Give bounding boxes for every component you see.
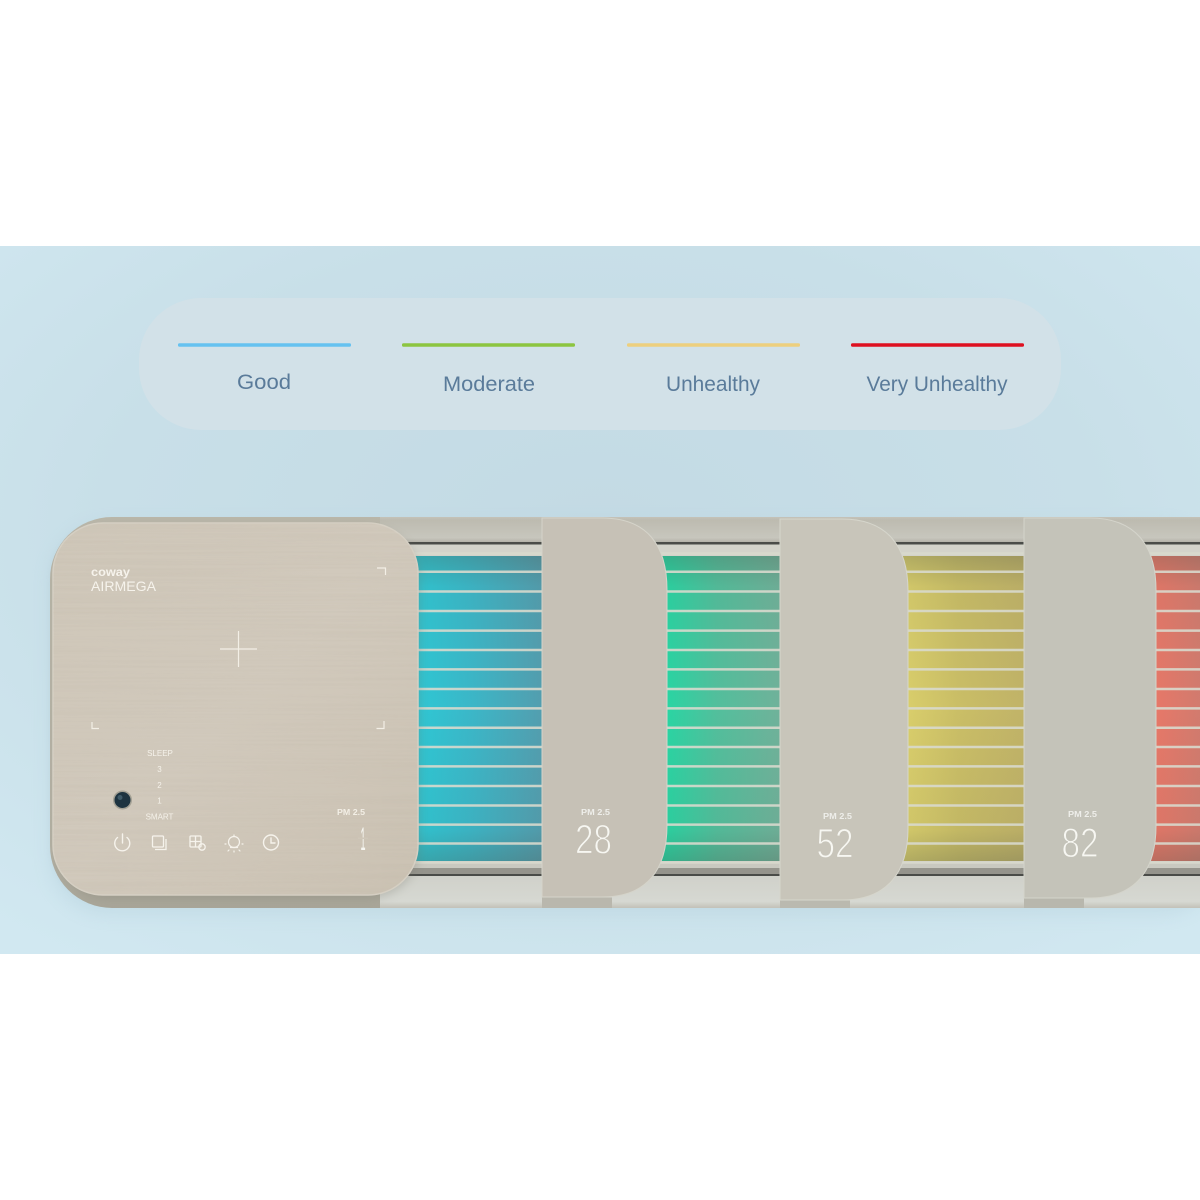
digital readout bbox=[358, 821, 368, 857]
fan speed labels: 3 bbox=[157, 765, 162, 774]
fan speed labels: 1 bbox=[157, 796, 162, 806]
icon: clock bbox=[264, 835, 278, 850]
panel segment: reading 82 bbox=[1024, 518, 1156, 908]
digital readout: 28 bbox=[575, 816, 612, 862]
bottom rail bbox=[380, 876, 1200, 908]
vent light shading bbox=[410, 556, 1200, 861]
fan speed labels: 2 bbox=[157, 781, 162, 790]
legend item: good: Good bbox=[237, 371, 291, 394]
logo: coway bbox=[91, 567, 131, 579]
legend item: moderate bbox=[402, 343, 575, 396]
digital readout: 52 bbox=[816, 820, 854, 866]
legend item: good bbox=[178, 343, 351, 394]
background band bbox=[0, 246, 1200, 954]
air quality light: red bbox=[1145, 556, 1200, 861]
vent slats bbox=[410, 554, 1200, 862]
PM 2.5 label: PM 2.5 bbox=[337, 808, 366, 817]
icon: grid with check bbox=[190, 836, 205, 850]
main control panel: 1 bbox=[360, 821, 366, 857]
panel segment: reading 82: PM 2.5 bbox=[1068, 810, 1098, 819]
device body bbox=[50, 517, 1200, 908]
wood grain texture bbox=[53, 523, 418, 895]
vent housing bbox=[380, 542, 1200, 876]
icon: power bbox=[115, 834, 130, 851]
icon: bulb bbox=[225, 835, 243, 852]
logo bbox=[91, 567, 157, 594]
panel edge shadow bbox=[56, 528, 420, 898]
legend item: very unhealthy: Very Unhealthy bbox=[866, 373, 1008, 396]
air quality light: green bbox=[660, 556, 785, 861]
air quality light: blue bbox=[410, 556, 545, 861]
fan speed labels: SMART bbox=[146, 812, 174, 822]
legend item: unhealthy: Unhealthy bbox=[666, 373, 760, 396]
top band bbox=[380, 517, 1200, 543]
panel segment: reading 28 bbox=[542, 518, 667, 908]
icon: layers bbox=[152, 836, 166, 850]
device: air purifier strip bbox=[50, 517, 1200, 914]
fan speed labels: SLEEP bbox=[147, 749, 173, 758]
panel segment: reading 28: PM 2.5 bbox=[581, 808, 611, 817]
legend pill bbox=[139, 298, 1061, 430]
legend item: moderate: Moderate bbox=[443, 373, 535, 396]
legend item: very unhealthy bbox=[851, 343, 1024, 396]
fan speed labels bbox=[146, 749, 174, 822]
logo: AIRMEGA bbox=[91, 578, 157, 594]
crosshair and corner marks bbox=[92, 568, 386, 728]
sensor bbox=[113, 790, 132, 810]
panel: air quality legend bbox=[139, 298, 1061, 430]
panel segment: reading 52 bbox=[780, 519, 908, 908]
infographic canvas bbox=[0, 246, 1200, 954]
main control panel bbox=[53, 523, 420, 898]
digital readout: 82 bbox=[1062, 819, 1098, 866]
air quality light: yellow bbox=[900, 556, 1030, 861]
device shadow bbox=[50, 524, 1200, 914]
legend item: unhealthy bbox=[627, 343, 800, 396]
panel segment: reading 52: PM 2.5 bbox=[823, 812, 853, 821]
wood face bbox=[53, 523, 418, 895]
